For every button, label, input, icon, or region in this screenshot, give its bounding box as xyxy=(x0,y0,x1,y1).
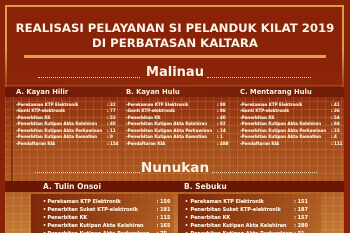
values: : 115 xyxy=(156,215,170,221)
values: : 32 xyxy=(107,102,116,106)
heading: C. Mentarang Hulu xyxy=(240,88,312,96)
values: : 40 xyxy=(107,121,116,126)
rows: -Ganti KTP-elektronik xyxy=(240,108,289,113)
rows: -Penerbitan Kutipan Akta Kelahiran xyxy=(240,121,321,126)
title rule xyxy=(24,54,326,58)
heading: Nunukan: Nunukan xyxy=(141,160,209,176)
rows: -Ganti KTP-elektronik xyxy=(126,108,175,113)
panel: Tulin Onsoi xyxy=(31,194,174,233)
rows: -Penerbitan Kutipan Akta Kelahiran xyxy=(126,121,207,126)
values: : 77 xyxy=(107,108,116,113)
bullets xyxy=(43,199,46,233)
rows: Penerbitan KK xyxy=(48,215,87,221)
values: : 41 xyxy=(331,102,340,106)
values: : 40 xyxy=(217,115,226,120)
bullets: • xyxy=(43,223,46,229)
heading: Malinau: Malinau xyxy=(146,65,204,80)
values xyxy=(156,199,170,233)
rows: Perekaman KTP Elektronik xyxy=(190,199,264,205)
title xyxy=(16,21,334,50)
rows: -Perekaman KTP Elektronik xyxy=(126,102,188,106)
rows: Perekaman KTP Elektronik xyxy=(48,199,121,205)
bullets xyxy=(185,199,188,233)
values: : 191 xyxy=(156,207,170,213)
rows: -Pendaftaran KIA xyxy=(240,141,279,146)
bullets: • xyxy=(43,199,46,205)
title: REALISASI PELAYANAN SI PELANDUK KILAT 2019 xyxy=(16,21,334,35)
heading: B. Kayan Hulu xyxy=(126,88,180,96)
rows: Penerbitan Kutipan Akta Kelahiran xyxy=(190,223,287,229)
values xyxy=(107,102,118,146)
values: : 23 xyxy=(331,128,340,133)
values: : 88 xyxy=(217,102,226,106)
rows: Penerbitan KK xyxy=(190,215,230,221)
heading: A. Kayan Hilir xyxy=(16,88,68,96)
rows xyxy=(16,102,102,146)
values: : 157 xyxy=(294,215,308,221)
rows: -Pendaftaran KIA xyxy=(126,141,165,146)
values: : 92 xyxy=(217,121,226,126)
rows xyxy=(240,102,326,146)
values: : 54 xyxy=(331,115,340,120)
title: DI PERBATASAN KALTARA xyxy=(92,36,258,50)
values: : 154 xyxy=(107,141,118,146)
values: : 52 xyxy=(107,115,116,120)
rows: -Ganti KTP-elektronik xyxy=(16,108,65,113)
bullets: • xyxy=(185,207,188,213)
Malinau header band xyxy=(5,87,344,96)
values: : 84 xyxy=(331,121,340,126)
values: : 24 xyxy=(217,128,226,133)
rows: -Penerbitan Kutipan Akta Kelahiran xyxy=(16,121,97,126)
values: : 111 xyxy=(331,141,342,146)
bullets: • xyxy=(43,207,46,213)
bullets: • xyxy=(185,215,188,221)
values xyxy=(294,199,308,233)
heading: B. Sebuku: B. Sebuku xyxy=(184,182,227,191)
values: : 488 xyxy=(217,141,228,146)
rows: Penerbitan Suket KTP-elektronik xyxy=(48,207,138,213)
panel: Kayan Hulu xyxy=(126,88,228,146)
panel: Kayan Hilir xyxy=(16,88,118,146)
rows: -Penerbitan Kutipan Akta Kematian xyxy=(16,134,97,139)
bullets: • xyxy=(185,199,188,205)
outer border xyxy=(5,5,344,95)
rows: -Penerbitan KK xyxy=(126,115,161,120)
values: : 86 xyxy=(217,108,226,113)
panel: Sebuku xyxy=(178,194,321,233)
values: : 187 xyxy=(294,207,308,213)
rows xyxy=(126,102,212,146)
bullets: • xyxy=(43,215,46,221)
rows: -Penerbitan KK xyxy=(240,115,275,120)
rows xyxy=(48,199,150,233)
rows: -Penerbitan Kutipan Akta Perkawinan xyxy=(240,128,326,133)
values: : 156 xyxy=(156,199,170,205)
values: : 1 xyxy=(217,134,223,139)
rows: Penerbitan Kutipan Akta Kelahiran xyxy=(48,223,144,229)
rows: -Perekaman KTP Elektronik xyxy=(240,102,302,106)
rows: -Penerbitan Kutipan Akta Kematian xyxy=(240,134,321,139)
Nunukan header band xyxy=(5,181,344,192)
rows: -Perekaman KTP Elektronik xyxy=(16,102,78,106)
rows: -Penerbitan Kutipan Akta Perkawinan xyxy=(16,128,102,133)
values: : 280 xyxy=(294,223,308,229)
rows: -Penerbitan Kutipan Akta Perkawinan xyxy=(126,128,212,133)
values: : 151 xyxy=(294,199,308,205)
heading: A. Tulin Onsoi: A. Tulin Onsoi xyxy=(43,182,101,191)
panel: Mentarang Hulu xyxy=(240,88,342,146)
values: : 165 xyxy=(156,223,170,229)
values: : 0 xyxy=(107,134,113,139)
rows xyxy=(190,199,292,233)
values: : 4 xyxy=(331,134,337,139)
values xyxy=(217,102,228,146)
values: : 11 xyxy=(107,128,116,133)
values: : 36 xyxy=(331,108,340,113)
rows: -Pendaftaran KIA xyxy=(16,141,55,146)
values xyxy=(331,102,342,146)
rows: Penerbitan Suket KTP-elektronik xyxy=(190,207,281,213)
bullets: • xyxy=(185,223,188,229)
rows: -Penerbitan Kutipan Akta Kematian xyxy=(126,134,207,139)
rows: -Penerbitan KK xyxy=(16,115,51,120)
